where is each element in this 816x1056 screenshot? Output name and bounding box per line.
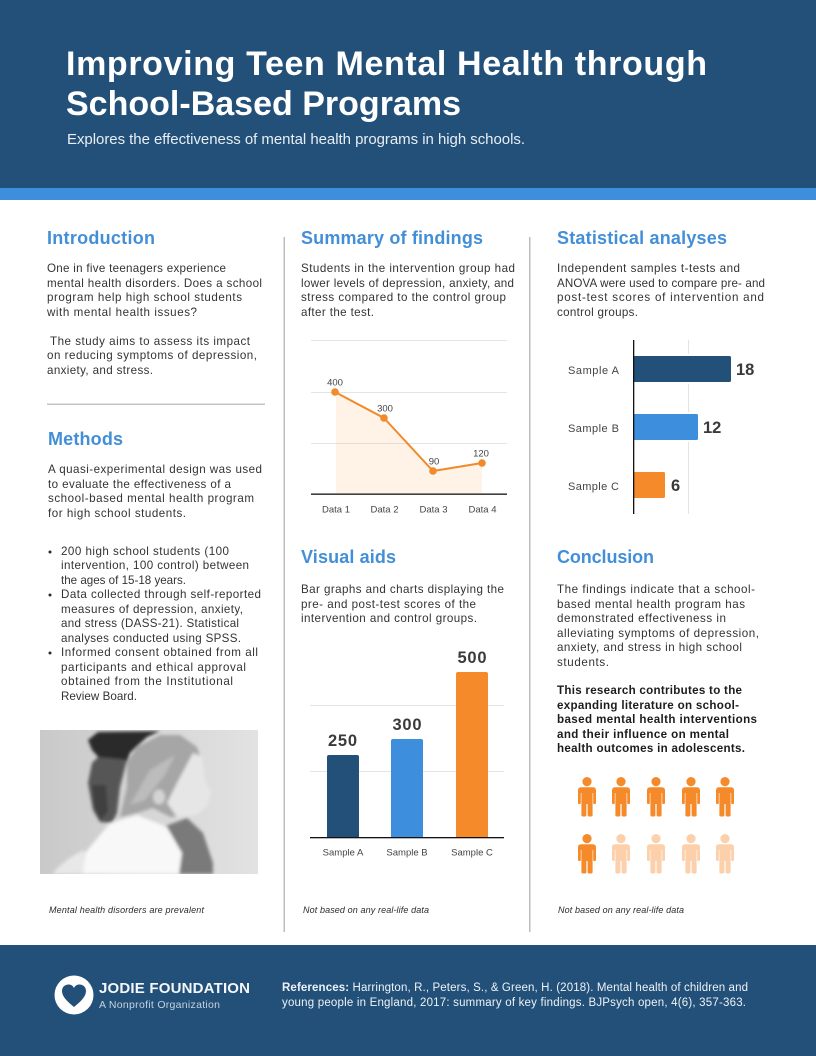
bullet list: methods: obtained from the Institutional: [61, 675, 233, 688]
heading: methods: Methods: [48, 429, 123, 449]
panel: introduction: [46, 228, 262, 377]
bullet list: methods: analyses conducted using SPSS.: [61, 632, 241, 645]
text block: introduction: mental health disorders. Does a school: [47, 277, 262, 290]
text block: introduction: with mental health issues?: [46, 306, 198, 319]
bar chart: horizontal: [568, 340, 754, 514]
text block: research contribution: expanding literature on school-: [557, 699, 739, 712]
bar chart: horizontal: Sample B: [568, 423, 619, 435]
text block: conclusion: anxiety, and stress in high school: [557, 641, 742, 654]
text block: statistical analyses: Independent samples t-tests and: [557, 262, 740, 275]
line chart: Data 4: [468, 504, 496, 516]
text block: methods: school-based mental health program: [48, 492, 254, 505]
subtitle: Explores the effectiveness of mental health programs in high schools.: [67, 131, 525, 148]
text block: methods: A quasi-experimental design was used: [48, 463, 262, 476]
pictogram: people: [578, 777, 734, 874]
bullet list: methods: participants and ethical approval: [61, 661, 246, 674]
bullet list: methods: [48, 545, 261, 703]
bar chart: horizontal: 6: [671, 477, 680, 495]
text block: visual aids: [301, 583, 504, 625]
text block: conclusion: students.: [557, 656, 609, 669]
line chart: Data 3: [420, 504, 448, 516]
text block: visual aids: pre- and post-test scores of the: [301, 598, 476, 611]
line chart: 120: [473, 448, 489, 460]
text block: introduction: [46, 262, 262, 377]
line chart: 90: [429, 456, 439, 468]
caption: visual aids: Not based on any real-life data: [303, 905, 429, 915]
text block: statistical analyses: ANOVA were used to compare pre- and: [557, 277, 765, 290]
heading: summary of findings: Summary of findings: [301, 228, 483, 248]
text block: research contribution: This research contributes to the: [557, 684, 743, 697]
column dividers: [47, 237, 530, 932]
bullet list: methods: Informed consent obtained from all: [61, 646, 258, 659]
bullet list: methods: intervention, 100 control) between: [61, 559, 249, 572]
text block: summary: stress compared to the control group: [301, 291, 506, 304]
bullet list: methods: and stress (DASS-21). Statistical: [61, 617, 239, 630]
bar chart: vertical: 250: [328, 732, 357, 750]
text block: summary: lower levels of depression, anxiety, and: [301, 277, 514, 290]
bar chart: vertical: Sample B: [386, 848, 428, 858]
organization name: [99, 980, 250, 1011]
bar chart: vertical: 300: [392, 716, 422, 734]
header banner: [0, 0, 816, 200]
text block: conclusion: demonstrated effectiveness in: [557, 612, 726, 625]
caption: photo: Mental health disorders are prevalent: [49, 905, 204, 915]
text block: visual aids: Bar graphs and charts displaying the: [301, 583, 504, 596]
text block: conclusion: [557, 583, 759, 669]
panel: visual aids: [301, 547, 504, 915]
bullet list: methods: Data collected through self-reported: [61, 588, 261, 601]
line chart: Data 2: [370, 504, 398, 516]
text block: statistical analyses: control groups.: [557, 306, 638, 319]
text block: introduction: One in five teenagers experience: [47, 262, 226, 275]
bar chart: horizontal: Sample A: [568, 365, 620, 377]
heading: visual aids: Visual aids: [301, 547, 396, 567]
bullet list: methods: 200 high school students (100: [61, 545, 229, 558]
heading: conclusion: Conclusion: [557, 547, 654, 567]
caption: conclusion: Not based on any real-life data: [558, 905, 684, 915]
title: School-Based Programs: [66, 85, 461, 123]
text block: statistical analyses: post-test scores of intervention and: [557, 291, 764, 304]
panel: conclusion: [557, 547, 759, 915]
text block: summary: Students in the intervention group had: [301, 262, 515, 275]
bar chart: horizontal: 12: [703, 419, 721, 437]
organization name: A Nonprofit Organization: [99, 999, 220, 1011]
text block: methods: to evaluate the effectiveness of a: [48, 478, 232, 491]
panel: statistical analyses: [557, 228, 765, 514]
heading: introduction: Introduction: [47, 228, 155, 248]
text block: conclusion: alleviating symptoms of depression,: [557, 627, 759, 640]
bar chart: horizontal: Sample C: [568, 481, 619, 493]
bar chart: vertical: Sample C: [451, 848, 493, 858]
text block: summary: [301, 262, 515, 319]
references: young people in England, 2017: summary of key findings. BJPsych open, 4(6), 357-363.: [282, 997, 746, 1009]
text block: research contribution: and their influence on mental: [557, 728, 729, 741]
text block: conclusion: The findings indicate that a school-: [557, 583, 755, 596]
panel: summary of findings: [301, 228, 515, 516]
line chart: [311, 340, 507, 516]
text block: methods: for high school students.: [48, 507, 186, 520]
photo: two people embracing: [40, 730, 258, 874]
organization name: JODIE FOUNDATION: [99, 980, 250, 997]
footer: [0, 945, 816, 1056]
bar chart: horizontal: 18: [736, 361, 754, 379]
heading: statistical analyses: Statistical analyses: [557, 228, 727, 248]
text block: introduction: on reducing symptoms of depression,: [47, 349, 257, 362]
bullet list: methods: measures of depression, anxiety,: [61, 603, 243, 616]
text block: summary: after the test.: [301, 306, 374, 319]
bullet list: methods: the ages of 15-18 years.: [61, 574, 186, 587]
panel: methods: [48, 429, 262, 703]
line chart: 300: [377, 404, 393, 414]
text block: visual aids: intervention and control groups.: [301, 612, 477, 625]
logo: heart in circle: [54, 976, 94, 1014]
text block: research contribution: [557, 684, 757, 755]
references: References: Harrington, R., Peters, S., & Green, H. (2018). Mental health of children and: [282, 982, 748, 994]
title: Improving Teen Mental Health through: [66, 45, 707, 83]
line chart: 400: [327, 378, 343, 388]
bullet list: methods: Review Board.: [61, 690, 137, 703]
bar chart: vertical: [310, 649, 504, 858]
text block: statistical analyses: [557, 262, 765, 319]
title: [66, 45, 707, 123]
text block: introduction: anxiety, and stress.: [47, 364, 153, 377]
references: [282, 982, 748, 1009]
text block: introduction: The study aims to assess its impact: [50, 335, 251, 348]
text block: research contribution: health outcomes in adolescents.: [557, 742, 745, 755]
bar chart: vertical: Sample A: [323, 848, 364, 858]
text block: methods: [48, 463, 262, 520]
text block: conclusion: based mental health program has: [557, 598, 745, 611]
text block: introduction: program help high school students: [47, 291, 242, 304]
text block: research contribution: based mental health interventions: [557, 713, 757, 726]
bar chart: vertical: 500: [458, 649, 486, 667]
line chart: Data 1: [322, 504, 350, 516]
